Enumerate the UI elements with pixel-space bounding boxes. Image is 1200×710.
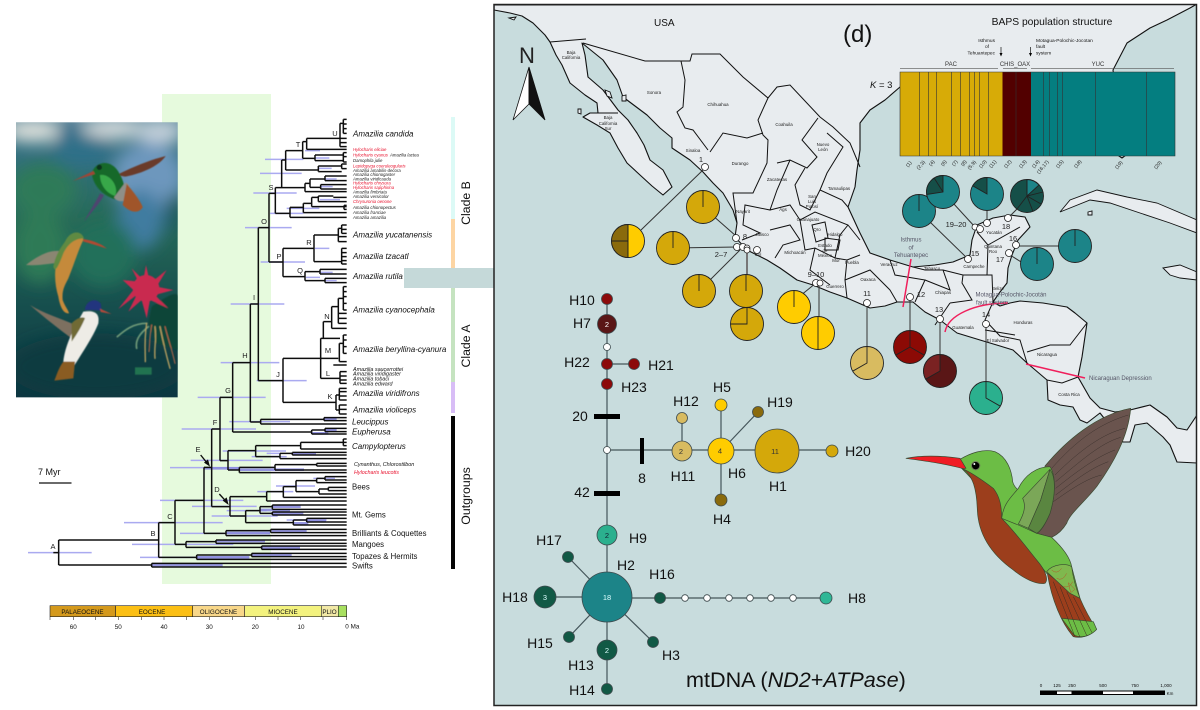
clade colour bars: [451, 117, 455, 569]
pie site 2-7 a: [656, 232, 690, 264]
title: mtDNA: mtDNA (ND2+ATPase): [686, 667, 906, 692]
body green: [960, 451, 1080, 598]
node labels: A: [50, 542, 56, 551]
barrier notes: [968, 38, 1093, 56]
taxon labels: Amazilia candida: [352, 130, 414, 138]
haplotype labels: H17: [536, 532, 562, 548]
map small labels: Veracruz: [880, 262, 898, 267]
geologic timescale: 50: [115, 624, 122, 631]
pie site 2-7 d: [730, 308, 764, 340]
taxon labels: Chrysuronia oenone: [353, 199, 392, 204]
pie site 18: [1010, 180, 1044, 212]
haplotype labels: H6: [728, 465, 746, 481]
barrier labels: of: [908, 246, 914, 252]
population labels: (19): [1114, 160, 1125, 171]
population labels: (6): [940, 159, 949, 168]
site numbers: [699, 155, 1017, 319]
arrow: node D: [219, 494, 226, 501]
panel letter (d): (d): [843, 21, 872, 48]
haplotype labels: H7: [573, 315, 591, 331]
haplotype labels: H5: [713, 379, 731, 395]
map small labels: Jalisco: [755, 232, 769, 237]
taxon labels: Brilliants & Coquettes: [352, 529, 427, 538]
group headers: CHIS_OAX: [1000, 62, 1030, 68]
site numbers: 16: [1009, 234, 1017, 243]
map scale bar: 750: [1131, 683, 1139, 688]
population labels: (16,17): [1036, 159, 1051, 175]
map small labels: Coahuila: [775, 122, 793, 127]
site numbers: 14: [982, 310, 990, 319]
node labels: C: [167, 512, 173, 521]
map small labels: Roo: [989, 249, 998, 254]
map small labels: Chihuahua: [707, 102, 729, 107]
geologic timescale: 10: [297, 624, 305, 631]
taxon labels: [352, 130, 447, 570]
taxon labels: Swifts: [352, 562, 373, 570]
map small labels: Chiapas: [935, 290, 952, 295]
network links: [545, 299, 832, 689]
phylogenetic tree: [28, 119, 347, 567]
haplotype labels: H13: [568, 657, 594, 673]
tail: [1047, 573, 1097, 637]
node labels: T: [296, 140, 301, 149]
node counts: 3: [543, 593, 547, 602]
map small labels: Tamaulipas: [828, 186, 851, 191]
population labels: (8): [960, 159, 969, 168]
node labels: [50, 129, 338, 551]
bill: [906, 456, 966, 469]
taxon labels: Amazilia tzacatl: [352, 252, 409, 261]
map small labels: Luis: [808, 199, 817, 204]
pie site 16: [1058, 230, 1092, 262]
sea background: [494, 4, 1197, 705]
wing: [1037, 408, 1131, 537]
map scale bar: 1,000: [1160, 683, 1172, 688]
site numbers: 9–10: [808, 270, 824, 279]
BAPS population structure chart: [870, 17, 1175, 175]
map small labels: Col: [755, 252, 761, 257]
error bars in lilac: [28, 151, 340, 557]
map small labels: Sinaloa: [686, 148, 701, 153]
pie site 12: [894, 330, 926, 364]
pie site 20: [970, 178, 1004, 210]
site numbers: 2–7: [715, 250, 727, 259]
scale: 7 Myr: 7 Myr: [38, 467, 61, 477]
site numbers: 8: [743, 232, 747, 241]
map scale bar: 500: [1099, 683, 1107, 688]
node labels: J: [276, 370, 280, 379]
node labels: E: [195, 445, 201, 454]
wing coverts: [1002, 467, 1054, 533]
arrowhead: node D: [223, 497, 229, 505]
connector: thick grey: [746, 250, 748, 278]
map small labels: Sonora: [647, 90, 662, 95]
barrier notes: Motagua-Polochic-Jocotan: [1036, 38, 1093, 44]
haplotype labels: H23: [621, 379, 647, 395]
taxon labels: Hylocharis chrysura: [353, 180, 391, 186]
Jamaica and islands: [509, 17, 1197, 280]
taxon labels: Leucippus: [352, 418, 388, 426]
taxon labels: Amazilia viridicauda: [352, 176, 392, 182]
map small labels: Campeche: [963, 264, 985, 269]
population labels: [905, 159, 1164, 175]
map scale bar: Km: [1167, 691, 1174, 696]
map scale bar: 125: [1053, 683, 1061, 688]
haplotype labels: 8: [638, 470, 646, 486]
site numbers: 1: [699, 155, 703, 164]
pie site 19: [926, 176, 960, 208]
arrowhead: node E: [204, 459, 210, 467]
population labels: (4): [928, 159, 937, 168]
node labels: Q: [297, 266, 303, 275]
map small labels: Sur: [605, 126, 612, 131]
map small labels: Qro: [813, 227, 821, 232]
map small labels: San: [808, 194, 816, 199]
taxon labels: Damophila julie: [353, 158, 383, 163]
rump scales: [1047, 565, 1080, 598]
map small labels: Nuevo: [817, 142, 830, 147]
map small labels: Hidalgo: [828, 232, 843, 237]
label: USA: USA: [654, 18, 675, 29]
node labels: P: [276, 252, 282, 261]
structure bars: [900, 72, 1175, 156]
pie site 15: [902, 194, 936, 228]
clade A label: Clade A: [459, 324, 473, 368]
map small labels: California: [562, 55, 581, 60]
map scale bar: [1040, 683, 1174, 696]
node counts: 11: [771, 447, 779, 456]
taxon labels: Hylocharis leucotis: [354, 470, 399, 476]
taxon labels: Amazilia chionopectus: [352, 205, 397, 210]
taxon labels: Amazilia franciae: [352, 210, 386, 215]
taxon labels: Amazilia beryllina-cyanura: [352, 345, 447, 354]
geologic timescale: Ma: [351, 624, 360, 630]
geologic timescale: MIOCENE: [268, 609, 298, 616]
site numbers: 13: [935, 305, 943, 314]
pie site 2-7 c: [730, 274, 762, 308]
node labels: S: [268, 183, 274, 192]
node counts: 2: [605, 320, 609, 329]
map frame: [494, 4, 1196, 706]
node labels: F: [213, 418, 218, 427]
map small labels: Yucatán: [986, 230, 1002, 235]
population labels: (15): [1055, 159, 1066, 170]
mutation bars: [594, 414, 644, 496]
K label: K = 3: [870, 80, 892, 91]
node labels: L: [326, 369, 330, 378]
taxon labels: Amazilia yucatanensis: [352, 230, 432, 240]
population labels: (12): [1003, 159, 1014, 170]
population labels: (10): [978, 159, 989, 170]
population labels: (20): [1153, 160, 1164, 171]
barrier labels: Tehuantepec: [894, 253, 928, 259]
population labels: (18): [1073, 159, 1084, 170]
map small labels: Zacatecas: [767, 177, 788, 182]
geologic timescale: [50, 606, 360, 631]
taxon labels: Cynanthus, Chlorostilbon: [354, 462, 414, 468]
node counts: 2: [605, 531, 609, 540]
haplotype labels: [502, 292, 871, 698]
panel: map (d): [494, 4, 1197, 706]
arrow: node E: [201, 455, 207, 463]
taxon labels: Amazilia fimbriata: [352, 190, 388, 194]
group headers: YUC: [1092, 62, 1105, 68]
group headers: PAC: [945, 62, 958, 68]
pie site 10: [802, 316, 834, 350]
scale: 7 Myr: [38, 467, 72, 483]
geologic timescale: PALAEOCENE: [61, 609, 104, 616]
map small labels: Honduras: [1013, 320, 1033, 325]
belly rufous: [962, 468, 1047, 584]
clade B label: Clade B: [459, 181, 473, 225]
haplotype labels: H9: [629, 530, 647, 546]
site numbers: 15: [971, 249, 979, 258]
taxon labels: Amazilia chionogaster: [352, 172, 396, 177]
site numbers: 12: [917, 290, 925, 299]
haplotype labels: H10: [569, 292, 595, 308]
haplotype labels: H3: [662, 647, 680, 663]
haplotype labels: 42: [574, 484, 590, 500]
node counts: 4: [718, 446, 722, 456]
haplotype labels: H14: [569, 682, 595, 698]
haplotype labels: H16: [649, 566, 675, 582]
map small labels: Nicaragua: [1037, 352, 1058, 357]
illustrated hummingbird: [906, 408, 1131, 637]
taxon labels: Amazilia cyanocephala: [352, 306, 435, 314]
node labels: K: [327, 392, 333, 401]
population labels: (2,3): [916, 159, 927, 171]
painting of three hummingbirds: [16, 122, 178, 398]
taxon labels: Campylopterus: [352, 442, 406, 451]
map small labels: Nayarit: [736, 209, 751, 214]
group headers: [900, 62, 1174, 68]
branches: [53, 119, 347, 567]
haplotype labels: H4: [713, 511, 731, 527]
node labels: G: [225, 386, 231, 395]
barrier notes: Isthmus: [978, 38, 996, 44]
map small labels: Durango: [732, 161, 749, 166]
connector band to map: [404, 268, 494, 288]
geologic timescale: 40: [160, 624, 168, 631]
barrier labels: [894, 238, 1152, 382]
haplotype labels: H20: [845, 443, 871, 459]
taxon labels: Hylocharis eliciae: [353, 147, 387, 152]
node labels: N: [324, 312, 330, 321]
node labels: R: [306, 238, 312, 247]
map small labels: Potosí: [806, 204, 819, 209]
node counts: 2: [605, 646, 609, 655]
node labels: H: [242, 351, 248, 360]
map small labels: México: [818, 253, 833, 258]
map small labels: Guatemala: [952, 325, 974, 330]
population labels: (14): [1031, 159, 1042, 170]
population labels: (13): [1018, 159, 1029, 170]
map small labels: [562, 50, 1080, 397]
map small labels: California: [599, 121, 618, 126]
top bird: [117, 156, 166, 177]
Cuba: [1060, 190, 1197, 233]
barrier labels: fault system: [976, 300, 1008, 306]
taxon labels: Eupherusa: [352, 428, 391, 436]
node counts: 18: [603, 593, 611, 602]
US and state borders: [550, 39, 1087, 383]
site numbers: 19–20: [946, 220, 966, 229]
haplotype labels: H22: [564, 354, 590, 370]
population pies: [612, 176, 1092, 414]
barrier notes: fault: [1036, 44, 1046, 50]
haplotype labels: H19: [767, 394, 793, 410]
map small labels: El Salvador: [987, 338, 1010, 343]
population labels: (7): [951, 159, 960, 168]
haplotype labels: H12: [673, 393, 699, 409]
haplotype labels: H1: [769, 478, 787, 494]
node labels: D: [214, 485, 220, 494]
population labels: (1): [905, 160, 914, 169]
geologic timescale: OLIGOCENE: [200, 609, 237, 616]
geologic timescale: PLIO: [322, 609, 337, 616]
map small labels: de: [823, 248, 828, 253]
pie site 14: [970, 382, 1002, 414]
node labels: U: [332, 129, 338, 138]
site numbers: 11: [863, 289, 871, 298]
taxon labels: Amazilia versicolor: [352, 194, 389, 199]
haplotype labels: H15: [527, 635, 553, 651]
pie site 13: [924, 354, 956, 388]
map small labels: Baja: [567, 50, 576, 55]
haplotype labels: H11: [671, 468, 696, 484]
haplotype labels: H18: [502, 589, 528, 605]
pie site 11: [850, 346, 884, 380]
north arrow: [513, 43, 545, 120]
map small labels: Costa Rica: [1058, 392, 1080, 397]
outgroups label: Outgroups: [459, 467, 473, 525]
barrier labels: Motagua-Polochic-Jocotán: [975, 292, 1047, 298]
flower: [118, 265, 173, 318]
land: North and Central America: [494, 4, 1197, 463]
plant leaves: [148, 294, 178, 350]
map small labels: Baja: [604, 115, 613, 120]
map small labels: Ags: [779, 207, 788, 212]
pie site 1: [612, 224, 644, 258]
taxon labels: Amazilia amabilis-decora: [352, 168, 401, 173]
taxon labels: Amazilia viridifrons: [352, 389, 420, 398]
sampling sites: [702, 164, 1020, 328]
taxon labels: Mt. Gems: [352, 510, 386, 520]
haplotype labels: H2: [617, 557, 635, 573]
site numbers: 18: [1002, 222, 1010, 231]
taxon labels: Amazilia violiceps: [352, 406, 416, 414]
barriers in red: [903, 259, 1085, 378]
barrier notes: Tehuantepec: [968, 50, 996, 56]
map scale bar: 250: [1068, 683, 1076, 688]
signature: [135, 367, 152, 375]
map small labels: Guerrero: [826, 284, 844, 289]
green time band: [162, 94, 271, 584]
map small labels: Tabasco: [924, 266, 941, 271]
taxon labels: Amazilia edward: [352, 382, 394, 388]
map small labels: Guanajuato: [797, 217, 820, 222]
middle bird: [26, 251, 65, 265]
geologic timescale: EOCENE: [139, 609, 165, 616]
haplotype labels: H8: [848, 590, 866, 606]
site numbers: 17: [996, 255, 1004, 264]
bottom bird: [30, 305, 72, 338]
pie site 9: [778, 290, 810, 324]
barrier labels: Isthmus: [900, 238, 922, 244]
BAPS population structure chart: BAPS population structure: [992, 17, 1113, 28]
pie site 8: [686, 190, 720, 224]
population labels: (11): [988, 159, 998, 170]
map small labels: Quintana: [984, 244, 1002, 249]
north arrow: N: [519, 43, 535, 68]
haplotype network: [502, 292, 871, 698]
node labels: O: [261, 217, 267, 226]
eye: [971, 461, 980, 470]
node counts: [543, 320, 779, 655]
map small labels: Oaxaca: [860, 277, 876, 282]
map small labels: Estado: [818, 243, 832, 248]
taxon labels: Amazilia saucerrottei: [352, 367, 404, 373]
taxon labels: Amazilia amazilia: [352, 215, 387, 220]
taxon labels: Amazilia tobaci: [352, 376, 390, 382]
taxon labels: Amazilia viridigaster: [352, 372, 401, 378]
map small labels: Mor: [832, 258, 840, 263]
haplotype labels: H21: [648, 357, 674, 373]
taxon labels: Topazes & Hermits: [352, 552, 418, 561]
taxon labels: Amazilia rutila: [352, 272, 403, 281]
node labels: I: [253, 293, 255, 302]
population labels: (5,9): [967, 159, 978, 171]
connectors: sites to pies: [641, 170, 1059, 382]
taxon labels: Hylocharis cyanus: [353, 152, 389, 158]
geologic timescale: 30: [206, 624, 213, 631]
haplotype labels: 20: [572, 408, 588, 424]
geologic timescale: 20: [252, 624, 259, 631]
map small labels: León: [818, 147, 828, 152]
taxon labels: Amazilia lactea: [389, 152, 420, 158]
node labels: B: [150, 529, 156, 538]
pie site 2-7 b: [682, 274, 716, 308]
geologic timescale: 0: [345, 624, 349, 630]
map scale bar: 0: [1040, 683, 1043, 688]
barrier notes: of: [985, 44, 990, 50]
node counts: 2: [679, 447, 683, 456]
pie site 17: [1020, 248, 1054, 280]
node labels: M: [325, 346, 331, 355]
barrier notes: system: [1036, 50, 1051, 56]
taxon labels: Mangoes: [352, 540, 384, 549]
taxon labels: Hylocharis sapphirina: [353, 185, 395, 190]
geologic timescale: 60: [70, 624, 77, 631]
taxon labels: Lepidopyga coeruleogularis: [353, 164, 406, 168]
map small labels: Michoacán: [784, 250, 806, 255]
barrier labels: Nicaraguan Depression: [1089, 376, 1152, 382]
map small labels: Puebla: [845, 260, 859, 265]
taxon labels: Bees: [352, 482, 370, 492]
map small labels: Belize: [992, 286, 1005, 291]
haplotype nodes: [534, 294, 838, 694]
